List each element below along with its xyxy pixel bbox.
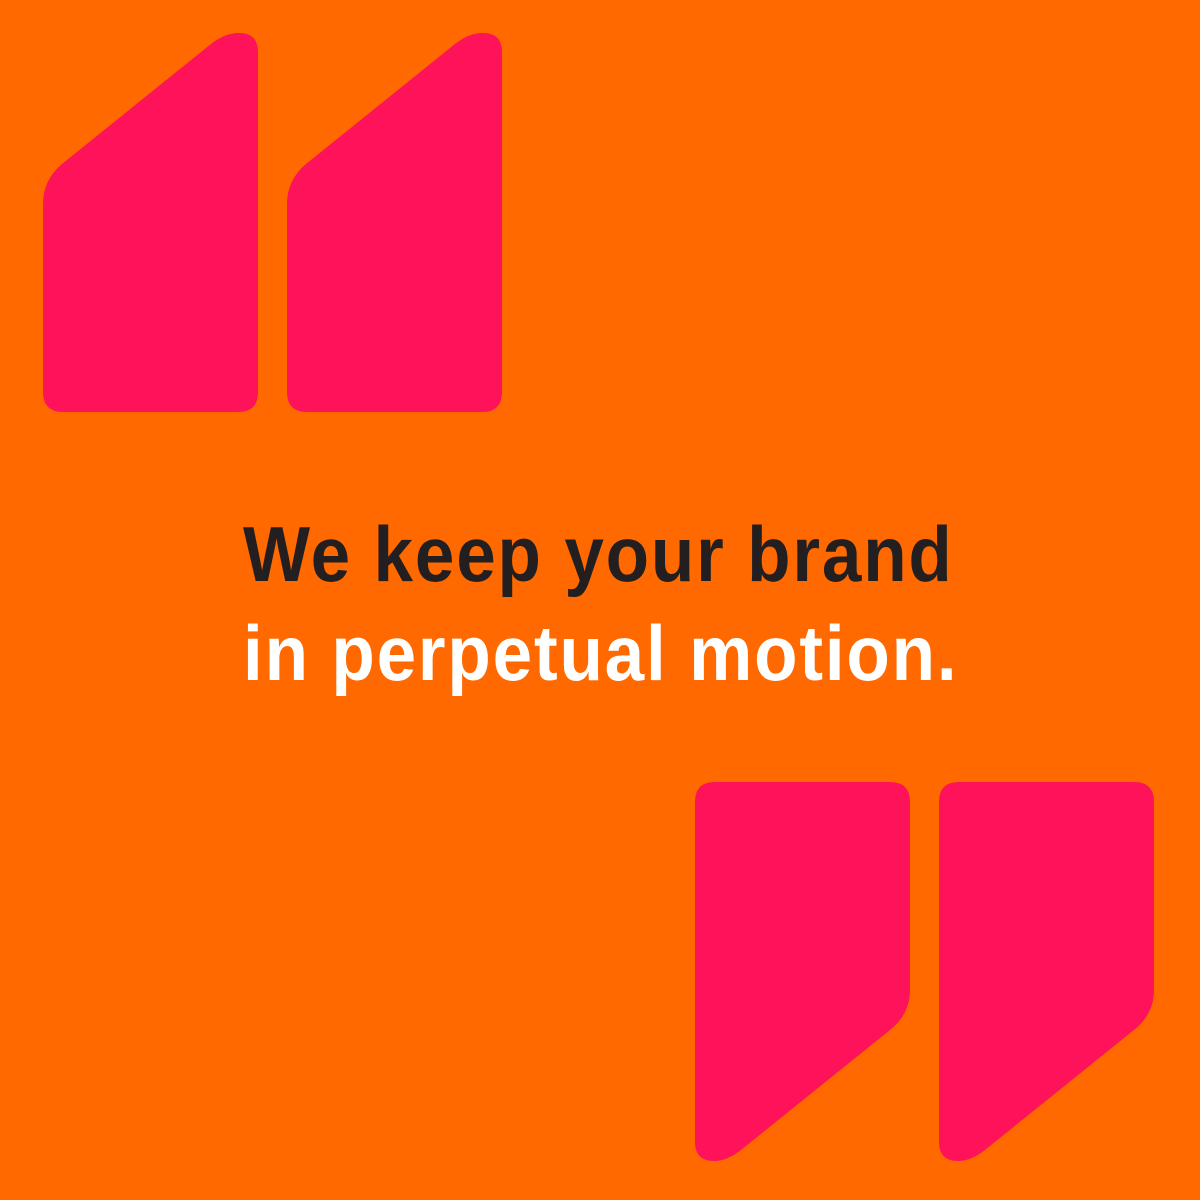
headline line one: We keep your brand [243, 510, 954, 598]
headline line two: in perpetual motion. [243, 609, 958, 697]
icon: closing quotation mark [695, 782, 1154, 1161]
icon: opening quotation mark [43, 33, 502, 412]
